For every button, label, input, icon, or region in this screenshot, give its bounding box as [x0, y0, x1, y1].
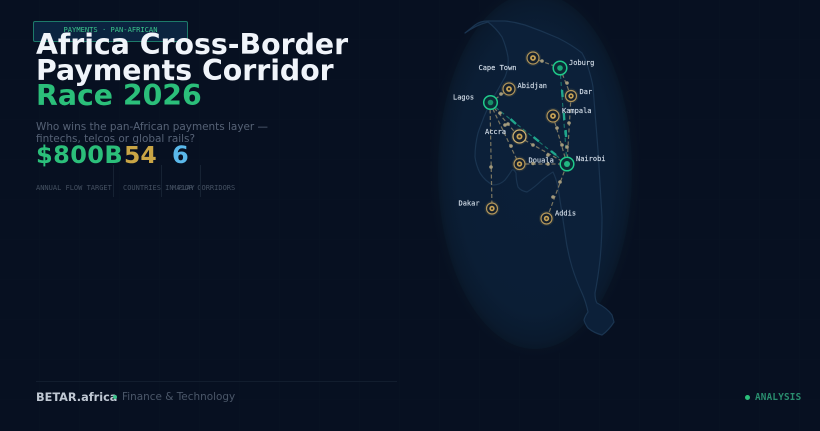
city labels: Accra	[485, 128, 506, 136]
footer brand: Finance & Technology	[122, 390, 235, 402]
teal pulses	[510, 90, 566, 155]
stat: annual flow target	[36, 141, 123, 192]
city labels: Cape Town	[478, 64, 516, 72]
title: Payments Corridor	[36, 54, 334, 86]
node: Douala	[512, 156, 527, 172]
subtitle: Who wins the pan-African payments layer —	[36, 120, 268, 132]
stat: major corridors: MAJOR CORRIDORS	[172, 184, 235, 192]
city labels: Addis	[555, 210, 576, 218]
node: Dar	[564, 88, 578, 104]
subtitle	[36, 120, 268, 145]
stat: major corridors	[172, 141, 235, 192]
city labels: Dakar	[458, 200, 480, 208]
node: Addis	[539, 211, 554, 226]
africa outline	[465, 21, 614, 335]
city labels: Abidjan	[518, 82, 547, 90]
hub: Nairobi	[560, 157, 574, 171]
badge: PAYMENTS · PAN-AFRICAN	[64, 25, 157, 34]
city labels: Lagos	[453, 94, 474, 102]
title: Africa Cross-Border	[36, 28, 348, 61]
city labels: Dar	[580, 88, 592, 96]
node: Dakar	[484, 201, 500, 216]
stat: countries in play	[123, 141, 195, 192]
city labels: Douala	[528, 156, 554, 164]
hub: Lagos	[484, 96, 497, 109]
node: Kampala	[545, 108, 561, 124]
city labels: Nairobi	[576, 155, 606, 163]
node: Accra	[511, 128, 528, 145]
stat: countries in play: COUNTRIES IN PLAY	[123, 184, 195, 192]
footer brand	[36, 390, 235, 404]
city labels: Joburg	[569, 59, 594, 67]
stat: annual flow target: ANNUAL FLOW TARGET	[36, 184, 112, 192]
subtitle: fintechs, telcos or global rails?	[36, 133, 195, 145]
footer brand: BETAR.africa	[36, 391, 117, 404]
stat: countries in play: 54	[124, 141, 157, 169]
node: Abidjan	[501, 81, 517, 97]
stat: major corridors: 6	[172, 141, 189, 169]
stat: annual flow target: $800B	[36, 141, 123, 169]
corridors	[490, 58, 571, 218]
city labels	[453, 59, 606, 218]
badge	[33, 21, 188, 42]
title: Race 2026	[36, 79, 202, 112]
title	[36, 28, 348, 112]
city labels: Kampala	[562, 107, 592, 115]
hub: Joburg	[553, 61, 567, 75]
corridor particles	[489, 59, 571, 199]
footer tag: ANALYSIS	[755, 392, 801, 402]
node: Cape Town	[525, 50, 541, 66]
